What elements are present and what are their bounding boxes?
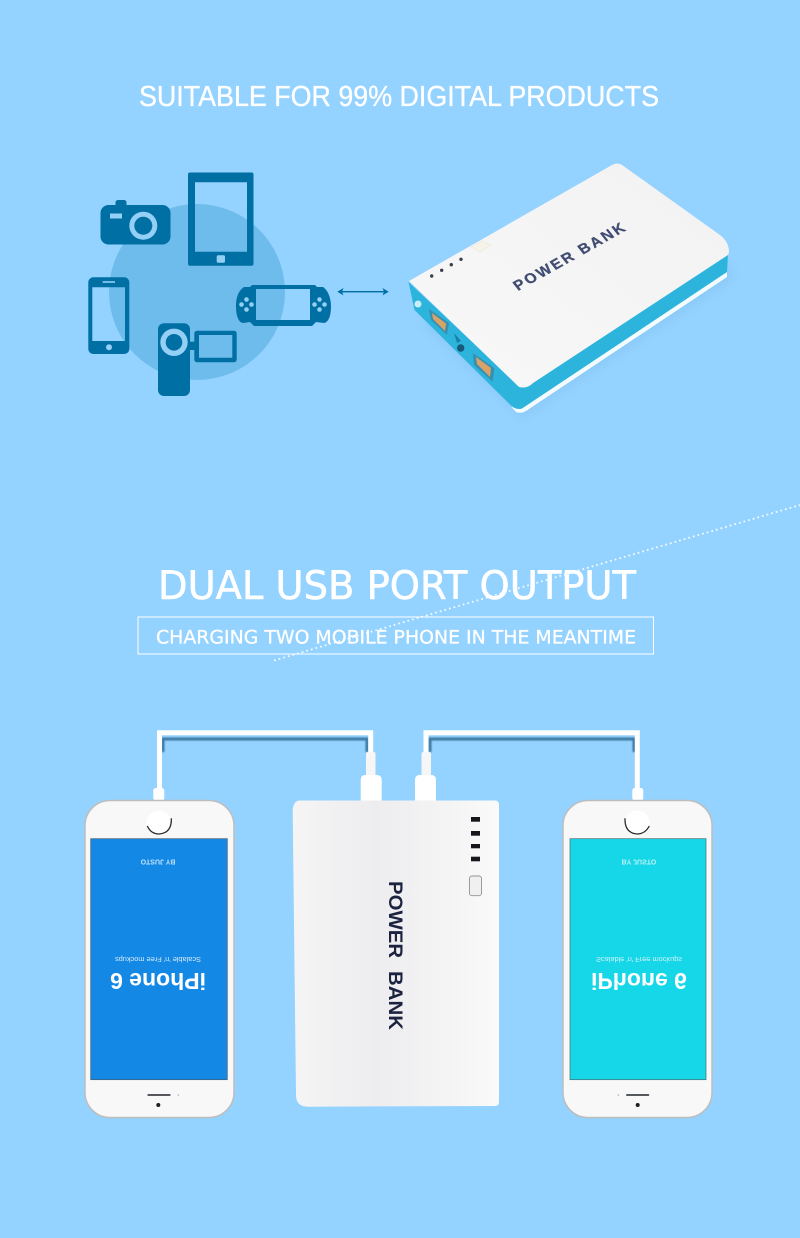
bank label: POWER BANK xyxy=(384,881,406,1030)
panel: digital device icons xyxy=(88,172,389,396)
panel: angled power bank product xyxy=(408,164,733,418)
icon backdrop circle xyxy=(109,204,285,380)
dc jack xyxy=(454,333,464,352)
icon: camera xyxy=(100,200,170,244)
usb port one xyxy=(429,309,449,335)
screen text: scalable mockups: Scalable 'n' Free mockups xyxy=(596,955,682,964)
bank body xyxy=(293,800,499,1107)
bank power button xyxy=(471,241,491,252)
right phone xyxy=(563,800,712,1118)
subtitle box xyxy=(138,617,654,654)
bank label: POWER BANK xyxy=(510,220,629,294)
usb port two xyxy=(473,353,494,382)
icon: smartphone xyxy=(88,277,129,354)
title: suitable for digital products: SUITABLE FOR 99% DIGITAL PRODUCTS xyxy=(139,81,659,113)
speaker and camera xyxy=(147,1094,179,1107)
bank top face xyxy=(409,164,729,388)
left phone xyxy=(85,800,234,1118)
arrow: double-headed connection xyxy=(337,288,389,295)
decorative dotted line xyxy=(274,505,800,660)
speaker and camera xyxy=(618,1094,649,1107)
screen text: by justo: BY JUSTO xyxy=(622,858,657,864)
bank side indicator xyxy=(414,300,422,308)
icon: video camera xyxy=(158,323,237,396)
screen text: iphone 6: iPhone 6 xyxy=(110,968,206,994)
icon: handheld game console xyxy=(236,285,331,326)
screen text: scalable mockups: Scalable 'n' Free mockups xyxy=(115,955,201,964)
heading: dual usb port output: DUAL USB PORT OUTPUT xyxy=(158,563,637,609)
bank LEDs xyxy=(471,817,480,861)
bank LED dots xyxy=(430,258,463,278)
screen text: by justo: BY JUSTO xyxy=(140,858,175,864)
bank bottom white strip xyxy=(512,271,727,413)
center power bank xyxy=(293,800,499,1107)
screen text: iphone 6: iPhone 6 xyxy=(591,968,687,994)
cable: right phone to bank xyxy=(415,733,643,800)
bank blue side xyxy=(408,254,728,409)
home button xyxy=(146,810,172,836)
cable: left phone to bank xyxy=(153,733,382,800)
subtitle box: CHARGING TWO MOBILE PHONE IN THE MEANTIME xyxy=(156,626,636,648)
icon: tablet xyxy=(188,172,254,266)
teal screen xyxy=(570,839,706,1080)
bank shadow xyxy=(420,262,733,418)
blue screen xyxy=(91,839,227,1080)
phone body xyxy=(85,800,234,1118)
home button xyxy=(625,810,650,836)
bank button xyxy=(470,876,482,896)
phone body xyxy=(563,800,712,1118)
